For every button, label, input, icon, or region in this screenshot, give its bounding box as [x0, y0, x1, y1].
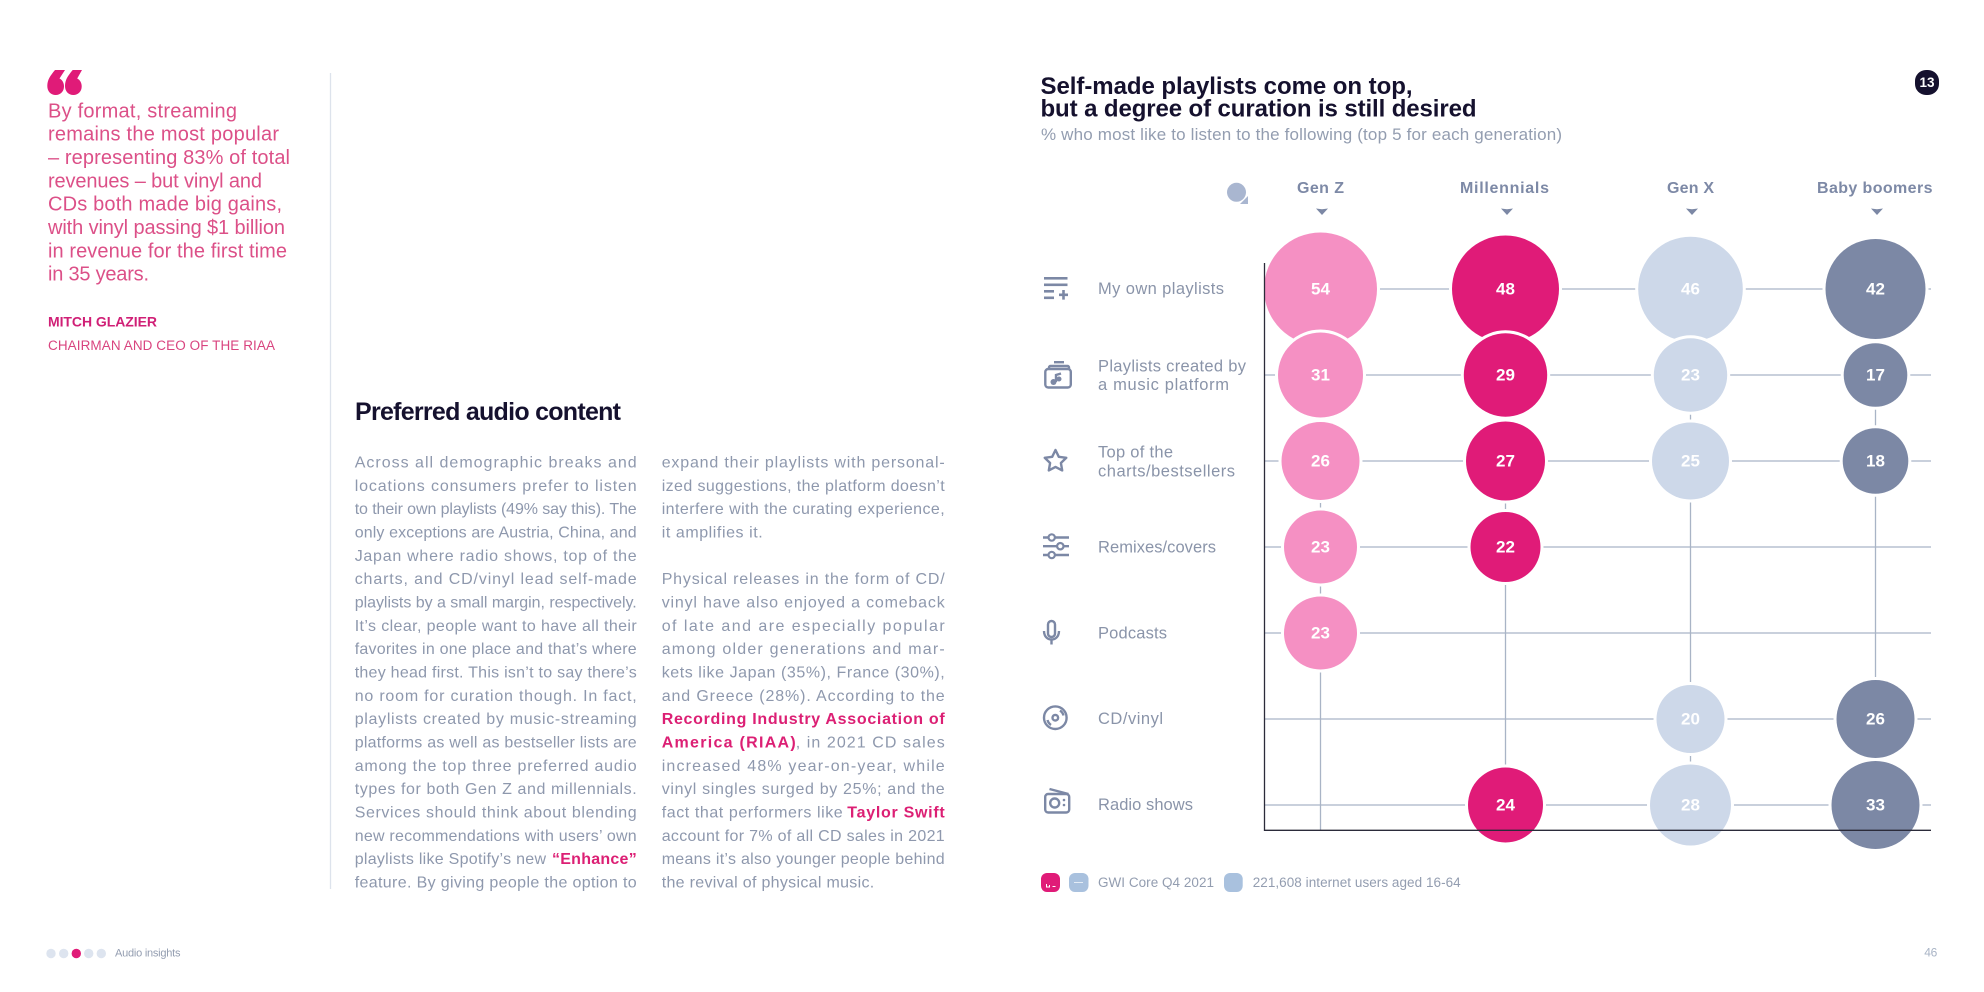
- text block: body column 1: Across all demographic breaks and: [355, 454, 637, 472]
- bubbles: Gen Z: 26: [1311, 452, 1330, 470]
- bubbles: Baby boomers: 18: [1866, 452, 1885, 470]
- bubbles: Gen X: 25: [1681, 452, 1700, 470]
- row: playlists created by a music platform: a music platform: [1098, 376, 1229, 394]
- text block: body column 1: among the top three preferred audio: [355, 758, 637, 775]
- row: my own playlists: [1044, 277, 1224, 300]
- bubbles: Gen X: 20: [1681, 710, 1700, 728]
- text block: body column 2: it amplifies it.: [662, 524, 763, 542]
- quote text: CDs both made big gains,: [48, 194, 282, 216]
- column headings: Millennials: [1460, 180, 1549, 197]
- text block: body column 2: means it’s also younger people behind: [662, 851, 945, 868]
- text block: body column 2: Taylor Swift: [847, 804, 945, 822]
- bubbles: Gen Z: [1264, 232, 1377, 670]
- text block: body column 2: America (RIAA): [662, 734, 796, 752]
- text block: body column 2: among older generations and mar-: [662, 641, 945, 658]
- text block: body column 1: Services should think about blending: [355, 804, 637, 822]
- text block: body column 1: [355, 454, 637, 892]
- text block: body column 1: platforms as well as bestseller lists are: [355, 734, 637, 752]
- quote attribution name: MITCH GLAZIER: [48, 314, 157, 330]
- row: remixes/covers: [1043, 534, 1216, 558]
- bubbles: Millennials: 29: [1496, 366, 1515, 384]
- text block: body column 1: new recommendations with users’ own: [355, 828, 637, 845]
- text block: body column 1: favorites in one place and that’s where: [355, 641, 637, 658]
- quote text: remains the most popular: [48, 124, 279, 146]
- source text: GWI Core Q4 2021: [1098, 875, 1214, 890]
- column headings: Baby boomers: [1817, 180, 1933, 197]
- page number badge: [1915, 70, 1939, 95]
- row: playlists created by a music platform: [1045, 357, 1247, 394]
- row: my own playlists: My own playlists: [1098, 280, 1224, 298]
- text block: body column 2: and Greece (28%). According to the: [662, 688, 945, 705]
- legend: source and sample: [1041, 873, 1461, 892]
- quote text: revenues – but vinyl and: [48, 170, 262, 192]
- text block: body column 1: playlists created by music-streaming: [355, 711, 637, 728]
- bubbles: Baby boomers: 26: [1866, 710, 1885, 728]
- quote attribution role: CHAIRMAN AND CEO OF THE RIAA: [48, 338, 275, 353]
- text block: body column 1: they head first. This isn’t to say there’s: [355, 664, 637, 682]
- bubbles: Baby boomers: 33: [1866, 796, 1885, 814]
- quote text: with vinyl passing $1 billion: [47, 217, 285, 239]
- text block: body column 2: interfere with the curating experience,: [662, 501, 945, 518]
- text block: body column 1: playlists by a small margin, respectively.: [355, 594, 637, 612]
- text block: body column 1: Japan where radio shows, top of the: [355, 548, 637, 565]
- text block: body column 2: vinyl singles surged by 25%; and the: [662, 781, 945, 798]
- text block: body column 1: It’s clear, people want to have all their: [355, 618, 637, 635]
- row: playlists created by a music platform: Playlists created by: [1098, 357, 1247, 375]
- bubbles: Gen Z: 31: [1311, 366, 1330, 384]
- bubbles: Gen Z: 23: [1311, 624, 1330, 642]
- bubbles: Gen X: 46: [1681, 280, 1700, 298]
- text block: body column 2: , in 2021 CD sales: [796, 734, 945, 752]
- text block: body column 2: [662, 454, 946, 892]
- icon: sample badge: [1224, 873, 1243, 892]
- text block: body column 1: playlists like Spotify’s new: [355, 851, 546, 868]
- chart title: [1040, 73, 1476, 123]
- row: top of the charts/bestsellers: charts/bestsellers: [1098, 463, 1235, 481]
- text block: body column 2: expand their playlists with personal-: [662, 454, 945, 472]
- icon: date badge: [1069, 873, 1088, 892]
- text block: body column 2: ized suggestions, the platform doesn’t: [662, 478, 945, 495]
- icon: source badge: [1041, 873, 1060, 892]
- bubbles: Gen Z: 23: [1311, 538, 1330, 556]
- text block: body column 2: fact that performers like: [662, 804, 843, 822]
- text block: body column 1: only exceptions are Austria, China, and: [355, 524, 637, 542]
- row: radio shows: [1045, 789, 1193, 814]
- row: top of the charts/bestsellers: [1045, 443, 1235, 481]
- footer: page number: 46: [1924, 946, 1938, 960]
- row: top of the charts/bestsellers: Top of the: [1098, 443, 1173, 461]
- text block: body column 2: account for 7% of all CD sales in 2021: [662, 828, 945, 845]
- icon: quotation mark: [47, 70, 82, 95]
- footer: section navigation: Audio insights: [115, 948, 181, 960]
- chart axes: [1264, 263, 1931, 830]
- text block: body column 1: to their own playlists (49% say this). The: [355, 501, 637, 518]
- row: cd/vinyl: CD/vinyl: [1098, 710, 1163, 728]
- text block: body column 1: no room for curation though. In fact,: [355, 688, 637, 705]
- quote text: [47, 100, 290, 286]
- chart title: but a degree of curation is still desired: [1040, 96, 1476, 123]
- column headings: Gen Z: [1297, 180, 1344, 197]
- text block: body column 2: Physical releases in the form of CD/: [662, 571, 945, 588]
- bubbles: Millennials: 27: [1496, 452, 1515, 470]
- column headings: Gen X: [1667, 180, 1714, 197]
- bubbles: Millennials: [1452, 236, 1559, 842]
- bubble matrix chart: [1264, 232, 1931, 849]
- text block: body column 2: increased 48% year-on-year, while: [662, 758, 945, 775]
- bubbles: Gen X: [1638, 237, 1743, 845]
- bubbles: Gen X: 23: [1681, 366, 1700, 384]
- text block: body column 2: Recording Industry Association of: [662, 711, 945, 728]
- text block: body column 1: charts, and CD/vinyl lead self-made: [355, 571, 637, 588]
- sample text: 221,608 internet users aged 16-64: [1253, 875, 1461, 890]
- text block: body column 1: feature. By giving people the option to: [355, 874, 637, 892]
- text block: body column 2: vinyl have also enjoyed a comeback: [662, 594, 946, 612]
- chart subtitle: % who most like to listen to the following (top 5 for each generation): [1041, 125, 1562, 144]
- quote text: in revenue for the first time: [48, 240, 287, 262]
- column headings: [1297, 180, 1933, 215]
- text block: body column 1: locations consumers prefer to listen: [355, 478, 637, 495]
- quote text: – representing 83% of total: [48, 147, 290, 169]
- text block: body column 2: the revival of physical music.: [662, 874, 874, 892]
- text block: body column 1: “Enhance”: [552, 851, 637, 868]
- row labels and icons: [1043, 277, 1247, 814]
- page number badge: 13: [1919, 75, 1935, 90]
- heading: preferred audio content: Preferred audio content: [355, 398, 622, 426]
- row: radio shows: Radio shows: [1098, 796, 1193, 814]
- row: cd/vinyl: [1044, 706, 1163, 729]
- quote text: in 35 years.: [48, 264, 149, 286]
- quote text: By format, streaming: [48, 100, 237, 122]
- footer: section navigation: [46, 948, 181, 960]
- bubbles: Millennials: 24: [1496, 796, 1515, 814]
- text block: body column 1: types for both Gen Z and millennials.: [355, 781, 637, 798]
- row: podcasts: [1044, 621, 1167, 644]
- bubbles: Gen Z: 54: [1311, 280, 1330, 298]
- icon: question bubble: [1227, 183, 1248, 204]
- bubbles: Baby boomers: 42: [1866, 280, 1885, 298]
- text block: body column 2: kets like Japan (35%), France (30%),: [662, 664, 945, 682]
- bubbles: Millennials: 22: [1496, 538, 1515, 556]
- bubbles: Millennials: 48: [1496, 280, 1515, 298]
- text block: body column 2: of late and are especially popular: [662, 618, 945, 635]
- bubbles: Gen X: 28: [1681, 796, 1700, 814]
- bubbles: Baby boomers: 17: [1866, 366, 1885, 384]
- row: podcasts: Podcasts: [1098, 624, 1167, 642]
- bubbles: Baby boomers: [1826, 239, 1926, 849]
- row: remixes/covers: Remixes/covers: [1098, 538, 1216, 556]
- chart title: Self-made playlists come on top,: [1040, 73, 1412, 100]
- panel: pull quote: [47, 70, 290, 353]
